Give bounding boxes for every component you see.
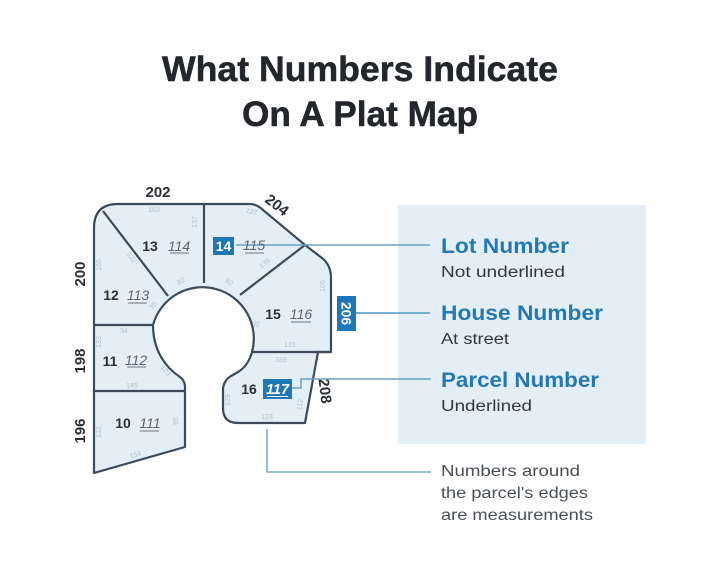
measurements: 94 xyxy=(120,328,128,335)
street number 200: 200 xyxy=(72,261,89,287)
street number 204: 204 xyxy=(262,191,292,220)
measurements: 127 xyxy=(245,208,258,217)
measurements xyxy=(96,207,327,460)
measurements: 135 xyxy=(258,257,272,270)
legend: house number: At street xyxy=(441,331,510,348)
lot 11: 112 xyxy=(125,352,147,368)
house number badge 206 xyxy=(337,296,356,331)
lot 13 xyxy=(142,238,190,254)
house number badge 206: 206 xyxy=(338,302,354,325)
lot 15: 116 xyxy=(290,306,312,322)
measurements: 165 xyxy=(96,259,103,271)
measurements: 35 xyxy=(149,301,159,311)
house number connector xyxy=(356,312,430,314)
measurements: 122 xyxy=(125,251,138,265)
measurements note: are measurements xyxy=(441,507,593,524)
street number 196: 196 xyxy=(72,418,89,444)
parcel number badge 117 xyxy=(263,379,292,399)
lot 10: 111 xyxy=(139,415,161,431)
lot 12 xyxy=(103,287,149,303)
panel: legend background xyxy=(398,205,646,444)
measurements: 163 xyxy=(148,207,160,214)
street number 202: 202 xyxy=(145,184,171,201)
measurements: 189 xyxy=(275,357,287,364)
lot 13: 13 xyxy=(142,238,158,254)
legend: house number xyxy=(441,302,603,348)
lot 12: 113 xyxy=(127,287,149,303)
measurements note: the parcel's edges xyxy=(441,485,588,502)
measurements note xyxy=(441,463,593,524)
legend: parcel number: Parcel Number xyxy=(441,369,599,392)
measurements: 129 xyxy=(225,394,232,406)
lot 16 label: 16 xyxy=(241,381,257,397)
lot number connector xyxy=(236,244,430,246)
measurements: 123 xyxy=(159,364,172,378)
parcels outline xyxy=(94,204,331,473)
lot dividers xyxy=(94,204,331,391)
measurements: 154 xyxy=(129,451,142,460)
measurements: 137 xyxy=(192,216,199,228)
lot 14 badge xyxy=(213,237,234,255)
legend: parcel number xyxy=(441,369,599,415)
legend: lot number: Lot Number xyxy=(441,235,569,258)
legend: lot number: Not underlined xyxy=(441,264,565,281)
lot 15: 15 xyxy=(265,306,281,322)
measurements: 82 xyxy=(224,278,234,288)
lot 14 badge: 14 xyxy=(216,238,231,254)
measurement connector xyxy=(267,429,431,472)
measurements: 105 xyxy=(320,280,327,292)
lot 11 xyxy=(103,352,147,369)
street number 198: 198 xyxy=(72,348,89,374)
lot 13: 114 xyxy=(168,238,190,254)
legend: house number: House Number xyxy=(441,302,603,325)
measurements: 123 xyxy=(261,414,273,421)
measurements: 82 xyxy=(176,277,186,287)
parcel number badge 117: 117 xyxy=(266,382,290,398)
lot 15 xyxy=(265,306,312,322)
measurements note: Numbers around xyxy=(441,463,580,480)
lot 10: 10 xyxy=(115,415,131,431)
measurements: 95 xyxy=(173,417,180,425)
legend: lot number xyxy=(441,235,569,281)
lot 11: 11 xyxy=(103,353,118,369)
lot 12: 12 xyxy=(103,287,119,303)
lot 10 xyxy=(115,415,161,431)
measurements: 132 xyxy=(96,426,103,438)
measurements: 35 xyxy=(253,320,262,329)
measurements: 131 xyxy=(284,342,296,349)
measurements: 145 xyxy=(126,383,138,390)
plat map xyxy=(72,184,334,473)
street number 208: 208 xyxy=(315,378,334,405)
measurements: 133 xyxy=(96,336,103,348)
title: What Numbers Indicate xyxy=(162,50,558,89)
measurements: 112 xyxy=(296,399,305,411)
title xyxy=(162,50,558,134)
title: On A Plat Map xyxy=(242,95,478,134)
parcel number connector xyxy=(291,379,431,388)
legend: parcel number: Underlined xyxy=(441,398,532,415)
lot number parcel 115: 115 xyxy=(243,237,265,253)
